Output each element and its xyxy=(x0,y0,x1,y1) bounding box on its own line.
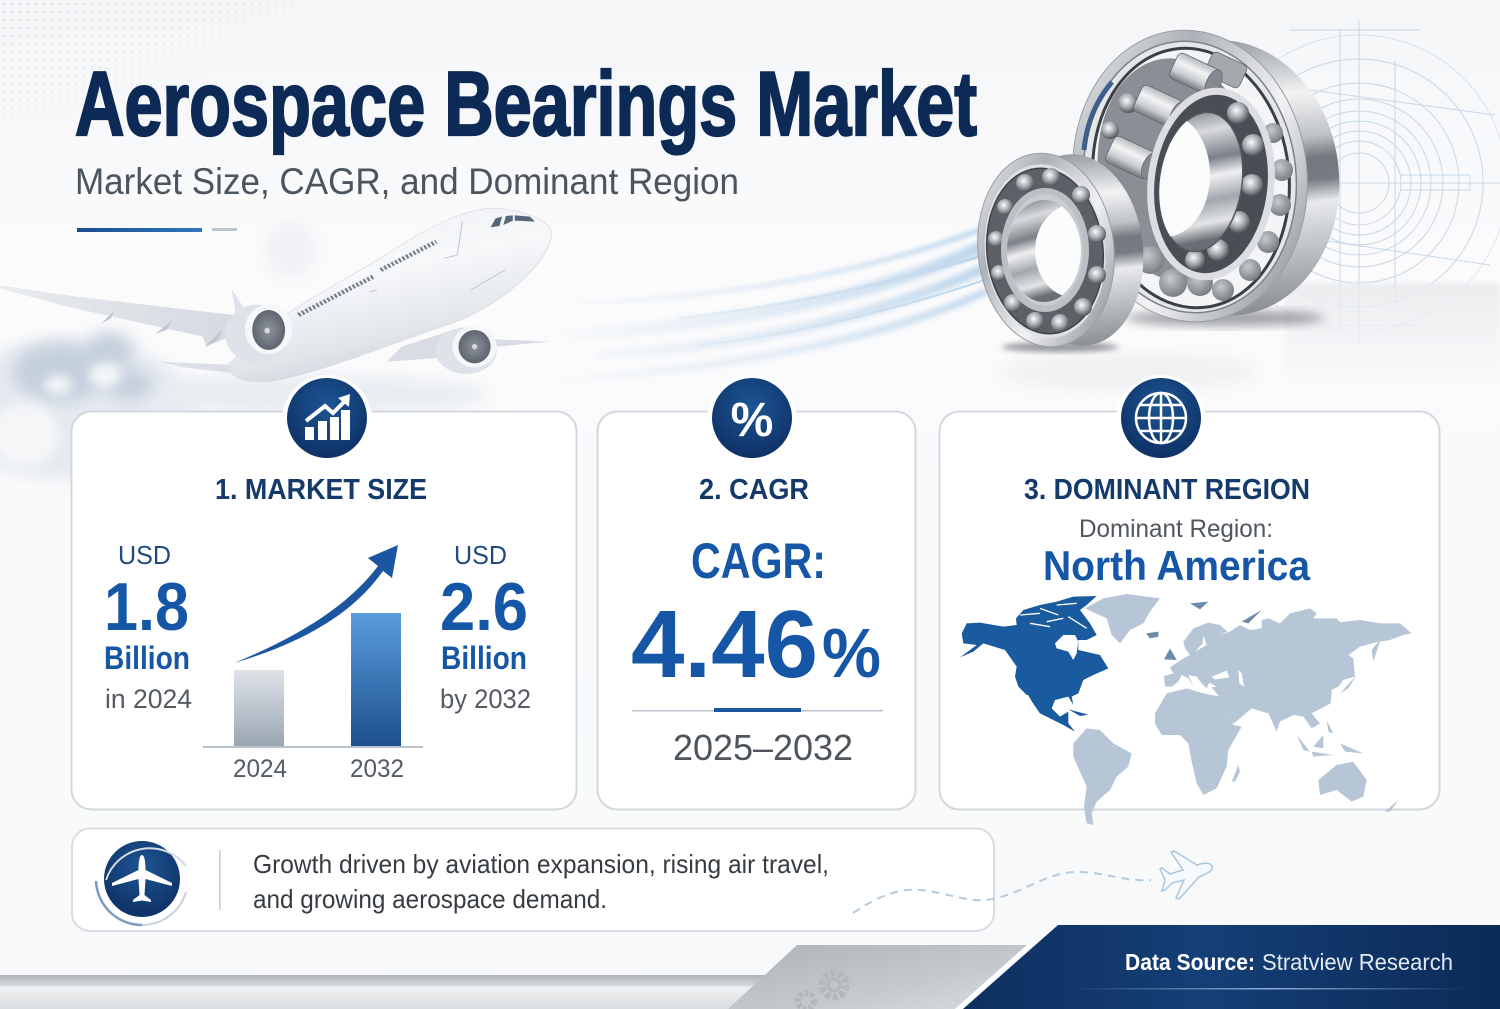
airplane xyxy=(0,208,552,382)
subtitle: Market Size, CAGR, and Dominant Region xyxy=(75,161,739,202)
bar chart xyxy=(203,613,423,783)
data source: Stratview Research xyxy=(1262,949,1453,975)
rollers xyxy=(1104,51,1248,182)
region name: North America xyxy=(1043,542,1311,589)
icon: airplane badge xyxy=(96,841,186,925)
floor under bearings xyxy=(1000,283,1500,392)
left engine xyxy=(225,305,292,363)
left wing xyxy=(0,286,339,353)
cagr label: CAGR: xyxy=(691,533,826,589)
small bearing xyxy=(977,152,1144,355)
right engine xyxy=(436,326,497,374)
bar chart: 2032 xyxy=(350,755,404,783)
stat: 2024 market size: Billion xyxy=(104,640,190,676)
icon: gears xyxy=(798,973,846,1009)
back balls xyxy=(1136,123,1293,301)
dashed flight path xyxy=(853,872,1151,913)
icon: percent: % xyxy=(731,394,773,447)
halftone dots xyxy=(2,2,285,117)
stat: 2024 market size xyxy=(104,540,192,714)
heading: cagr: 2. CAGR xyxy=(699,474,809,506)
stat: 2032 market size: by 2032 xyxy=(440,684,531,714)
stat: 2032 market size: 2.6 xyxy=(440,569,528,645)
icon: airplane outline xyxy=(1160,851,1212,899)
heading: market size: 1. MARKET SIZE xyxy=(215,474,427,506)
panel: growth drivers xyxy=(72,828,994,931)
stat: 2032 market size: USD xyxy=(454,540,507,570)
footer silver strip xyxy=(0,975,780,1009)
icon: market size chart xyxy=(282,375,372,465)
icon: globe xyxy=(1116,375,1206,465)
title underline xyxy=(77,228,237,232)
panel: dominant region xyxy=(940,412,1440,810)
divider xyxy=(219,850,220,910)
fuselage xyxy=(229,208,552,382)
bar chart: 2024 xyxy=(233,755,287,783)
darker islands xyxy=(1146,602,1262,660)
speed streaks xyxy=(540,228,985,380)
blueprint drawing xyxy=(1211,20,1500,345)
tail stabilizer xyxy=(159,362,233,373)
inland seas xyxy=(1195,635,1244,687)
region label: Dominant Region: xyxy=(1079,515,1273,543)
panel: cagr xyxy=(598,412,916,810)
title: Aerospace Bearings Market xyxy=(75,54,977,155)
wing flap fairings xyxy=(101,310,222,347)
cagr value: % xyxy=(822,614,881,692)
stat: 2032 market size xyxy=(440,540,531,714)
blue reflection xyxy=(1084,82,1112,150)
right wing xyxy=(387,332,549,362)
driver text: and growing aerospace demand. xyxy=(253,884,607,914)
driver text: Growth driven by aviation expansion, rising air travel, xyxy=(253,849,829,879)
north america highlighted xyxy=(960,596,1108,732)
inner ring xyxy=(1142,85,1280,283)
large bearing xyxy=(1072,30,1340,331)
data source: Data Source: xyxy=(1125,949,1255,975)
cabin windows xyxy=(299,242,436,315)
stat: 2024 market size: USD xyxy=(118,540,171,570)
steel balls xyxy=(988,168,1106,332)
other continents xyxy=(1073,594,1412,825)
winglet fin xyxy=(232,288,245,318)
stat: 2024 market size: in 2024 xyxy=(105,684,192,714)
stat: 2032 market size: Billion xyxy=(441,640,527,676)
footer silver panel xyxy=(728,945,1032,1009)
growth arrow xyxy=(234,545,398,663)
cockpit windows xyxy=(491,215,535,227)
door lines xyxy=(369,222,505,292)
stat: 2024 market size: 1.8 xyxy=(104,569,189,645)
cagr value: 4.46 xyxy=(631,591,818,698)
footer navy panel xyxy=(963,925,1500,1009)
heading: dominant region: 3. DOMINANT REGION xyxy=(1024,474,1310,506)
cagr divider xyxy=(632,708,883,712)
icon: percent xyxy=(707,375,797,465)
clouds xyxy=(0,220,490,480)
driver text xyxy=(253,849,829,914)
cagr period: 2025–2032 xyxy=(673,727,853,768)
world map xyxy=(960,594,1412,825)
panel: market size xyxy=(72,412,576,810)
